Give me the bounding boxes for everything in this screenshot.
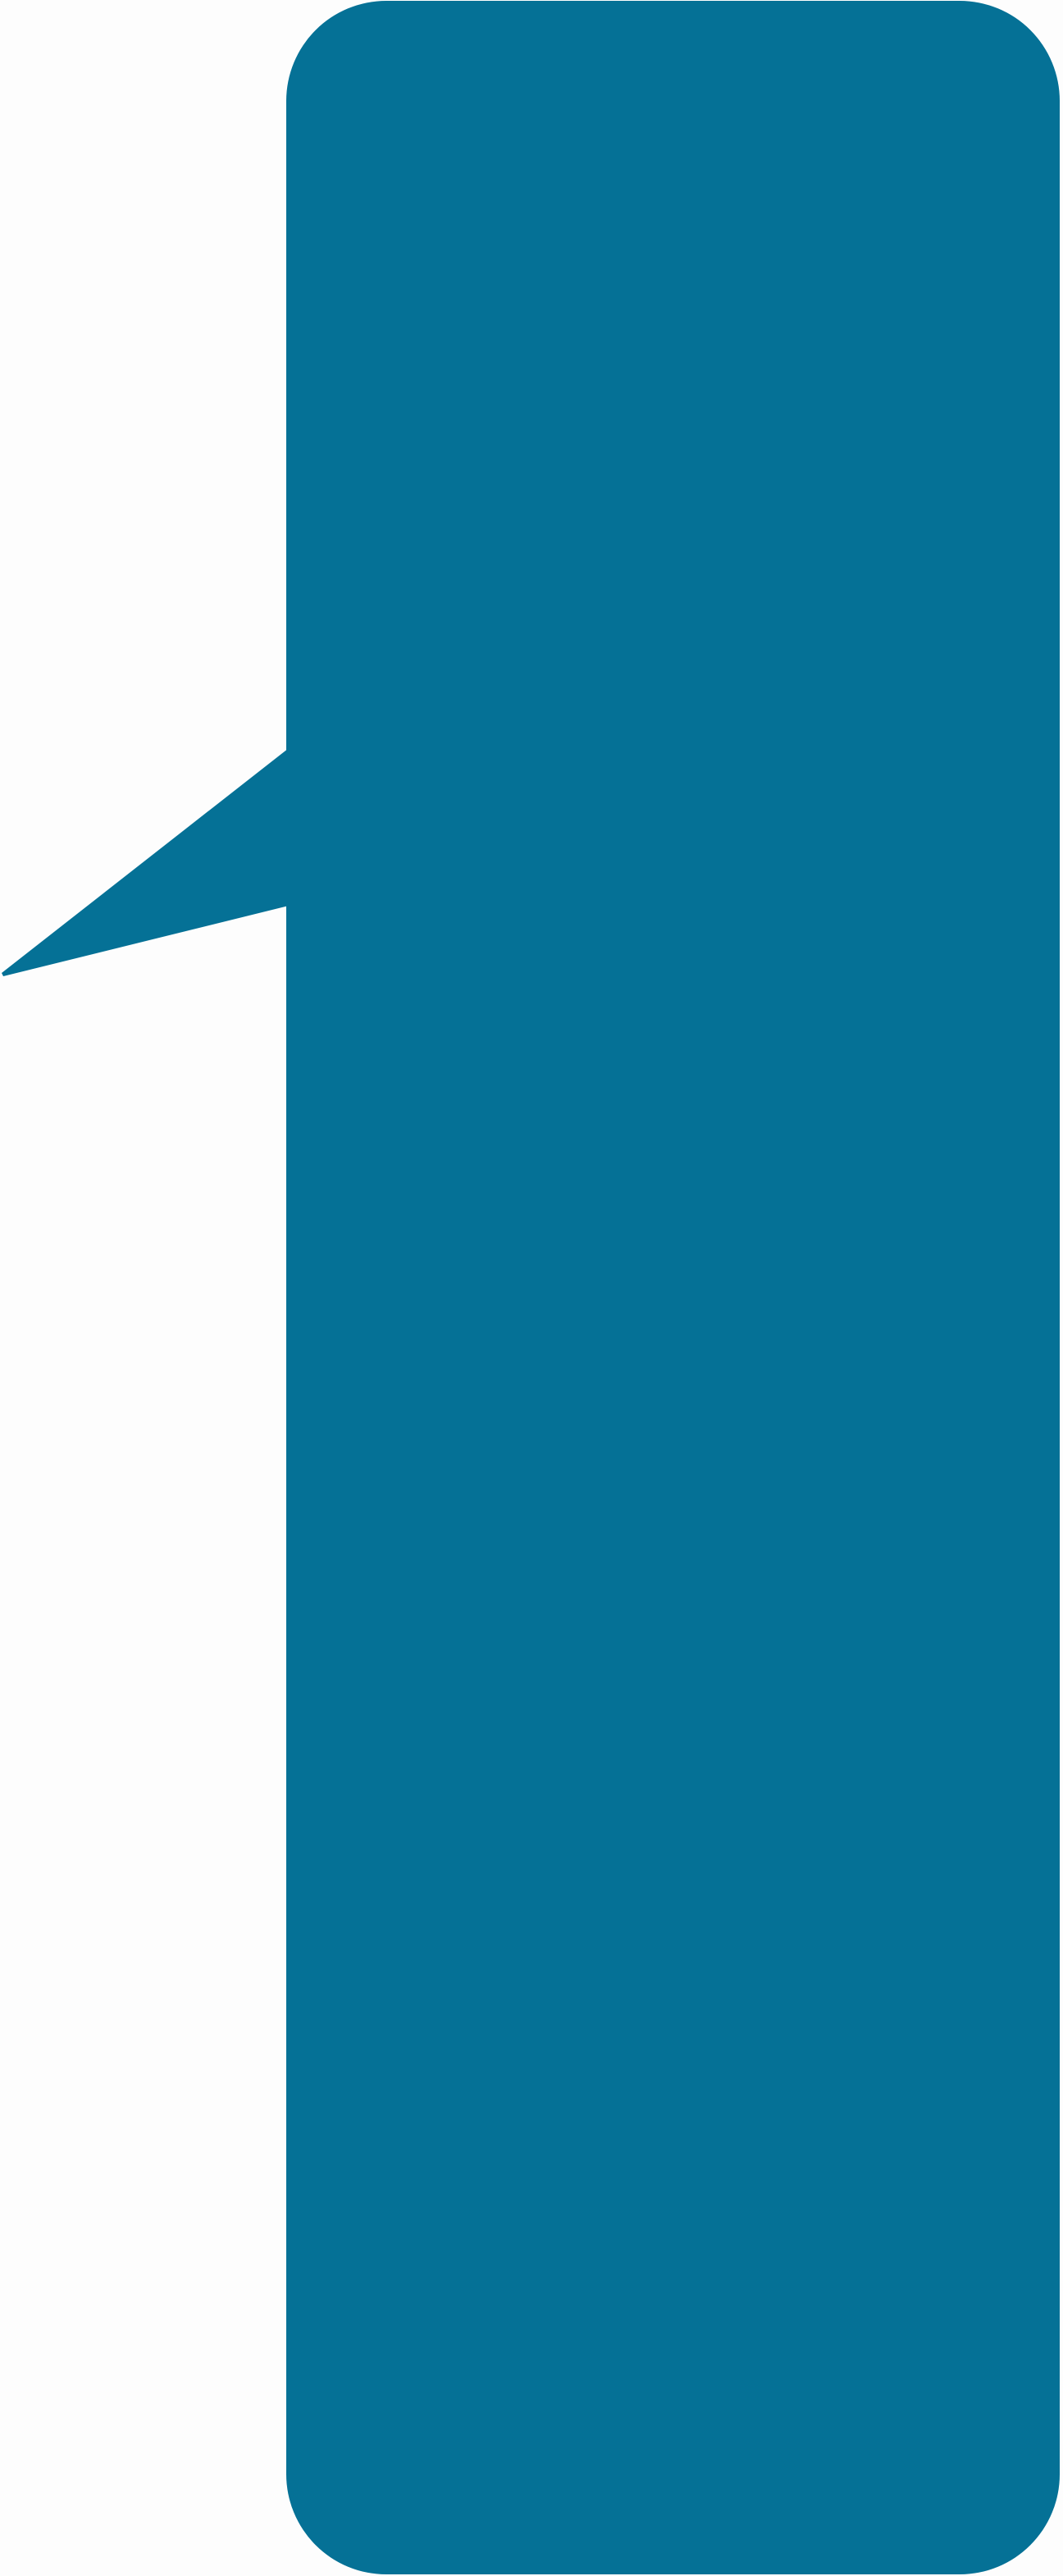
bubble tail (2, 748, 289, 976)
bubble body (286, 1, 1060, 2574)
